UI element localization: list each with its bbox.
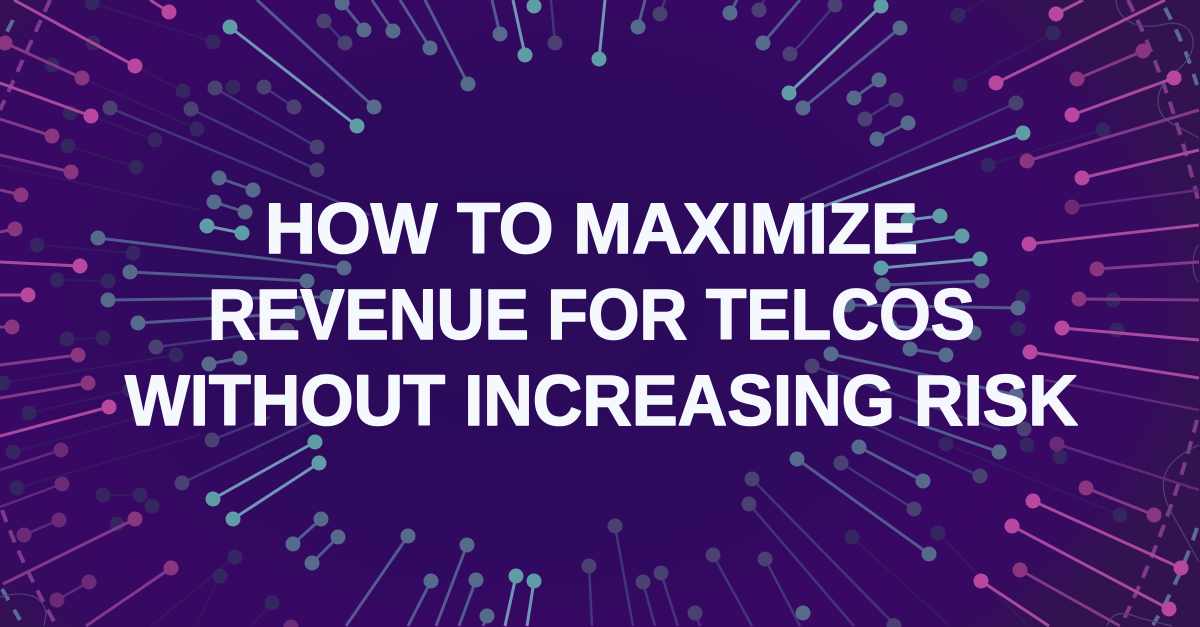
connectors: dim violet — [110, 0, 1024, 627]
title: WITHOUT INCREASING RISK — [125, 362, 1078, 441]
connectors: dim pink — [0, 190, 1199, 627]
dot cut by the bottom edge — [284, 620, 298, 627]
connectors: slate blue — [98, 0, 1018, 626]
connectors: bright teal — [207, 0, 1023, 626]
title: HOW TO MAXIMIZE — [265, 190, 918, 269]
title: REVENUE FOR TELCOS — [208, 276, 975, 355]
title — [125, 190, 1078, 441]
dot cut by the bottom edge — [887, 618, 902, 627]
